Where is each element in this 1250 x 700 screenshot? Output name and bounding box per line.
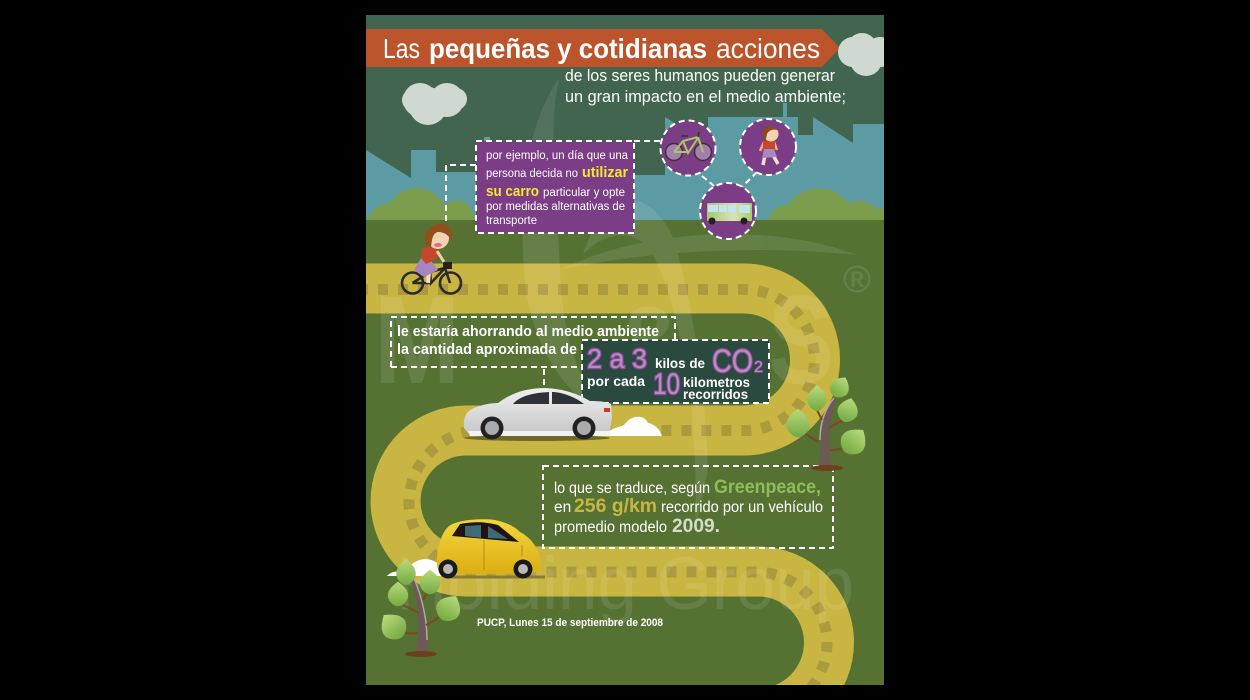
subtitle: [565, 66, 846, 106]
bushes right: [768, 189, 884, 222]
watermark: Holding Group: [396, 542, 854, 625]
text: Greenpeace box: 2009.: [672, 516, 720, 537]
source: PUCP, Lunes 15 de septiembre de 2008: [477, 617, 663, 629]
bicycle: [402, 268, 461, 294]
text: savings sentence: le estaría ahorrando al medio ambiente: [397, 323, 659, 340]
road: [366, 288, 829, 700]
tree left: [374, 559, 466, 657]
icon: bus circle: [700, 183, 756, 239]
silver car: [464, 388, 612, 441]
panel: purple text box: particular y opte: [543, 187, 625, 199]
connector to silver car: [543, 369, 545, 388]
panel: purple text box: por ejemplo, un día que una: [486, 150, 629, 162]
yellow car: [437, 519, 545, 578]
sky: [366, 15, 884, 178]
panel: purple text box: [476, 141, 634, 233]
panel: purple text box: su carro: [486, 183, 539, 200]
watermark: M: [374, 271, 460, 410]
title text: Las: [383, 33, 420, 64]
text: savings sentence: la cantidad aproximada de: [397, 341, 577, 358]
panel: CO2 box: kilos de: [655, 355, 705, 371]
smoke behind yellow car: [387, 559, 452, 576]
panel: purple text box: transporte: [486, 215, 537, 227]
watermark: [374, 78, 871, 625]
icon: bicycle circle: [660, 120, 716, 176]
subtitle: un gran impacto en el medio ambiente;: [565, 87, 846, 106]
title banner: [366, 29, 840, 67]
watermark: &: [610, 284, 689, 407]
panel: CO2 box: kilometros: [683, 374, 750, 390]
panel: CO2 box: por cada: [587, 373, 645, 389]
basket: [443, 262, 452, 269]
skyline: [366, 103, 884, 225]
girl on bicycle: [414, 224, 452, 283]
smoke: [606, 417, 662, 436]
text: Greenpeace box: [543, 466, 833, 548]
panel: purple text box: por medidas alternativas de: [486, 201, 625, 213]
text: Greenpeace box: promedio modelo: [554, 519, 667, 536]
panel: purple text box: persona decida no: [486, 168, 578, 180]
text: Greenpeace box: Greenpeace,: [714, 477, 821, 498]
icon: girl circle: [740, 119, 796, 175]
title text: [383, 33, 820, 64]
cloud left: [402, 83, 467, 125]
bushes left: [368, 188, 476, 222]
poster: [366, 15, 884, 700]
road centre dashes: [366, 290, 827, 700]
text: Greenpeace box: 256 g/km: [574, 496, 657, 517]
panel: CO2 box: 2: [754, 359, 763, 376]
cyclist: [402, 224, 461, 294]
cloud right: [838, 33, 884, 76]
watermark: ®: [843, 259, 871, 301]
connector lines: [446, 141, 757, 225]
panel: CO2 box: recorridos: [683, 386, 748, 402]
text: Greenpeace box: en: [554, 499, 571, 516]
infographic canvas: [366, 15, 884, 685]
panel: CO2 box: [582, 340, 769, 403]
text: Greenpeace box: recorrido por un vehículo: [661, 499, 823, 516]
title text: acciones: [716, 33, 820, 64]
tree right: [786, 373, 873, 471]
ground: [366, 220, 884, 685]
title text: pequeñas y cotidianas: [429, 33, 707, 64]
subtitle: de los seres humanos pueden generar: [565, 66, 835, 85]
panel: CO2 box: CO: [712, 343, 753, 379]
watermark: S: [768, 271, 834, 410]
text: Greenpeace box: lo que se traduce, según: [554, 480, 710, 497]
panel: purple text box: utilizar: [582, 164, 628, 181]
panel: CO2 box: 2 a 3: [587, 343, 647, 374]
panel: CO2 box: 10: [653, 368, 680, 401]
text: savings sentence: [391, 317, 675, 367]
